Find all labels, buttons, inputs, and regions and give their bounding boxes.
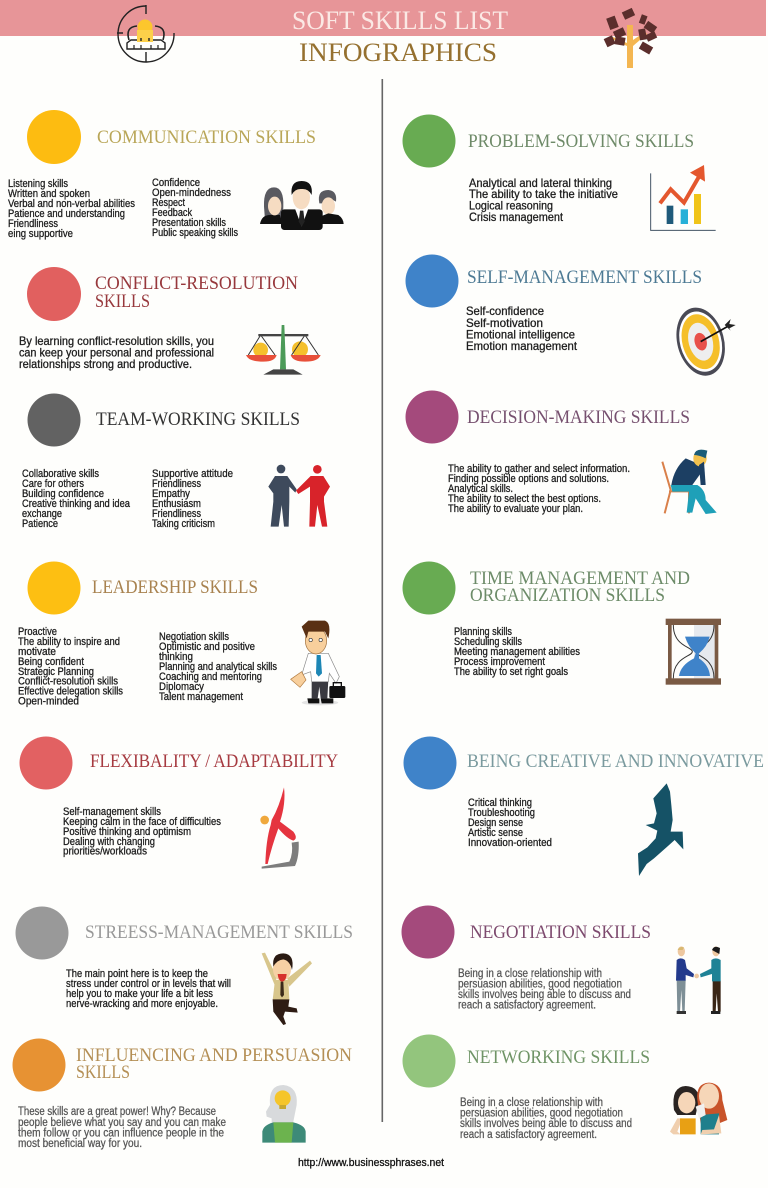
icon: jumping happy man (262, 953, 312, 1025)
description: nerve-wracking and more enjoyable. (66, 998, 218, 1010)
footer url: http://www.businessphrases.net (298, 1157, 444, 1169)
panel: stress-management skills (16, 906, 353, 1025)
circle badge (28, 394, 80, 446)
description (19, 334, 214, 371)
heading: TIME MANAGEMENT AND (470, 568, 690, 589)
list left: Open-minded (18, 696, 79, 708)
heading: FLEXIBALITY / ADAPTABILITY (90, 751, 338, 772)
icon: bulb and target (117, 5, 174, 62)
circle badge (20, 736, 72, 790)
list: Planning skills (454, 626, 512, 638)
list: The ability to set right goals (454, 666, 568, 678)
list: priorities/workloads (63, 846, 147, 858)
list right: thinking (159, 651, 193, 663)
list: Dealing with changing (63, 836, 155, 848)
icon: hourglass (666, 619, 721, 685)
list: Finding possible options and solutions. (448, 473, 609, 485)
icon: balance scale (246, 325, 321, 375)
list left: Verbal and non-verbal abilities (8, 198, 135, 210)
description (458, 968, 631, 1012)
circle badge (12, 1038, 66, 1092)
panel: flexibility and adaptability (20, 736, 338, 869)
list left: Care for others (22, 478, 84, 490)
icon: yoga figure (260, 787, 299, 869)
list left: Effective delegation skills (18, 686, 123, 698)
heading: SELF-MANAGEMENT SKILLS (467, 267, 702, 288)
panel: conflict-resolution skills (19, 267, 321, 375)
list right: Presentation skills (152, 217, 226, 229)
list right: Coaching and mentoring (159, 671, 262, 683)
description: can keep your personal and professional (19, 346, 214, 360)
list: Emotional intelligence (466, 328, 575, 342)
heading: NEGOTIATION SKILLS (470, 922, 651, 943)
header banner (0, 0, 766, 36)
list right: Optimistic and positive (159, 641, 255, 653)
central divider (382, 79, 383, 1122)
heading (95, 273, 298, 312)
list (63, 806, 221, 858)
icon: two people shaking hands (268, 465, 330, 527)
list: Self-motivation (466, 316, 543, 330)
list left: Written and spoken (8, 188, 90, 200)
circle badge (406, 254, 458, 308)
list: Innovation-oriented (468, 837, 552, 849)
icon: eagle (638, 783, 683, 876)
list left: Being confident (18, 656, 84, 668)
circle badge (402, 906, 454, 958)
list left: Strategic Planning (18, 666, 94, 678)
list: Keeping calm in the face of difficulties (63, 816, 221, 828)
panel: problem-solving skills (402, 114, 716, 230)
list left: Friendliness (8, 218, 58, 230)
list: Process improvement (454, 656, 545, 668)
heading: DECISION-MAKING SKILLS (467, 407, 690, 428)
icon: growth chart (651, 165, 716, 230)
list: The ability to take the initiative (469, 187, 618, 201)
heading: SKILLS (95, 291, 150, 312)
description (66, 968, 231, 1010)
title: soft skills list: SOFT SKILLS LIST (292, 6, 508, 35)
circle badge (404, 736, 456, 790)
description: reach a satisfactory agreement. (460, 1129, 597, 1141)
list right: Public speaking skills (152, 227, 238, 239)
heading: PROBLEM-SOLVING SKILLS (468, 131, 694, 152)
list left: Proactive (18, 626, 57, 638)
panel: time management and organization skills (402, 562, 721, 685)
heading: COMMUNICATION SKILLS (97, 127, 316, 148)
description: skills involves being able to discuss and (460, 1118, 632, 1130)
list: The ability to gather and select information. (448, 463, 630, 475)
panel: team-working skills (22, 394, 330, 530)
list: Self-management skills (63, 806, 161, 818)
icon: head with light bulb (262, 1085, 306, 1143)
icon: thinking man on chair (662, 450, 717, 514)
list (466, 304, 578, 353)
description: By learning conflict-resolution skills, you (19, 334, 214, 348)
heading: STREESS-MANAGEMENT SKILLS (85, 922, 353, 943)
list: Self-confidence (466, 304, 544, 318)
list: Analytical skills. (448, 483, 513, 495)
circle badge (402, 562, 456, 614)
list left: Conflict-resolution skills (18, 676, 118, 688)
heading (76, 1045, 352, 1083)
list: Scheduling skills (454, 636, 522, 648)
list: Critical thinking (468, 797, 532, 809)
panel: networking skills (402, 1034, 727, 1141)
list left: exchange (22, 508, 62, 520)
panel: decision-making skills (406, 390, 717, 515)
list right: Feedback (152, 207, 192, 219)
subtitle: infographics: INFOGRAPHICS (299, 38, 497, 67)
list: Design sense (468, 817, 523, 829)
list left: Creative thinking and idea (22, 498, 131, 510)
description: Being in a close relationship with (458, 968, 602, 980)
list: Positive thinking and optimism (63, 826, 191, 838)
description: people believe what you say and you can make (18, 1117, 226, 1129)
heading: INFLUENCING AND PERSUASION (76, 1045, 352, 1066)
heading: SKILLS (76, 1062, 130, 1083)
list right: Respect (152, 197, 185, 209)
circle badge (16, 906, 68, 960)
list right (152, 468, 233, 530)
description (460, 1097, 632, 1141)
list right (159, 631, 277, 703)
list left: The ability to inspire and (18, 636, 120, 648)
list left: Patience (22, 518, 58, 530)
icon: business people (260, 181, 344, 230)
list: Crisis management (469, 210, 564, 224)
description: stress under control or in levels that will (66, 978, 231, 990)
panel: self-management skills (406, 254, 736, 381)
list: Emotion management (466, 339, 578, 353)
icon: two friends with phone (670, 1083, 727, 1134)
list right: Enthusiasm (152, 498, 201, 510)
panel: influencing and persuasion skills (12, 1038, 352, 1150)
description: help you to make your life a bit less (66, 988, 213, 1000)
heading: CONFLICT-RESOLUTION (95, 273, 298, 294)
description: skills involves being able to discuss and (458, 989, 631, 1001)
description: These skills are a great power! Why? Because (18, 1106, 216, 1118)
panel: being creative and innovative (404, 736, 764, 876)
heading: LEADERSHIP SKILLS (92, 577, 258, 598)
list: The ability to evaluate your plan. (448, 503, 583, 515)
description: persuasion abilities, good negotiation (460, 1108, 623, 1120)
list (448, 463, 630, 515)
description: them follow or you can influence people in the (18, 1128, 224, 1140)
description: relationships strong and productive. (19, 357, 192, 371)
list: Meeting management abilities (454, 646, 580, 658)
heading: ORGANIZATION SKILLS (470, 585, 665, 606)
circle badge (402, 1034, 456, 1088)
list right: Planning and analytical skills (159, 661, 277, 673)
list: The ability to select the best options. (448, 493, 601, 505)
description: reach a satisfactory agreement. (458, 1000, 596, 1012)
list left: Building confidence (22, 488, 104, 500)
list left: Collaborative skills (22, 468, 99, 480)
panel: negotiation skills (402, 906, 721, 1014)
list right: Friendliness (152, 478, 201, 490)
list (469, 176, 618, 224)
circle badge (27, 267, 81, 321)
list: Analytical and lateral thinking (469, 176, 612, 190)
icon: tree with books (604, 8, 657, 68)
list left (18, 626, 123, 708)
icon: businessman with briefcase (291, 621, 345, 705)
heading (470, 568, 690, 606)
list (468, 797, 552, 849)
list right: Diplomacy (159, 681, 204, 693)
circle badge (406, 390, 458, 444)
list left (22, 468, 131, 530)
list right (152, 177, 238, 239)
list: Logical reasoning (469, 198, 553, 212)
description: The main point here is to keep the (66, 968, 208, 980)
circle badge (27, 110, 81, 164)
circle badge (28, 562, 80, 614)
icon: business handshake (676, 946, 721, 1014)
list (454, 626, 580, 678)
description: Being in a close relationship with (460, 1097, 603, 1109)
heading: NETWORKING SKILLS (467, 1047, 650, 1068)
heading: TEAM-WORKING SKILLS (96, 409, 300, 430)
panel: leadership skills (18, 562, 345, 708)
panel: communication skills (8, 110, 344, 240)
description: persuasion abilities, good negotiation (458, 978, 622, 990)
list: Troubleshooting (468, 807, 535, 819)
circle badge (402, 114, 456, 168)
icon: target with arrow (669, 302, 736, 381)
list right: Empathy (152, 488, 190, 500)
list right: Taking criticism (152, 518, 215, 530)
list left (8, 178, 135, 240)
description: most beneficial way for you. (18, 1138, 142, 1150)
list right: Talent management (159, 691, 243, 703)
list right: Open-mindedness (152, 187, 231, 199)
list left: eing supportive (8, 228, 73, 240)
list left: Patience and understanding (8, 208, 125, 220)
list left: motivate (18, 646, 56, 658)
list right: Supportive attitude (152, 468, 233, 480)
list: Artistic sense (468, 827, 523, 839)
list right: Friendliness (152, 508, 201, 520)
list right: Confidence (152, 177, 200, 189)
list left: Listening skills (8, 178, 68, 190)
description (18, 1106, 226, 1150)
list right: Negotiation skills (159, 631, 229, 643)
